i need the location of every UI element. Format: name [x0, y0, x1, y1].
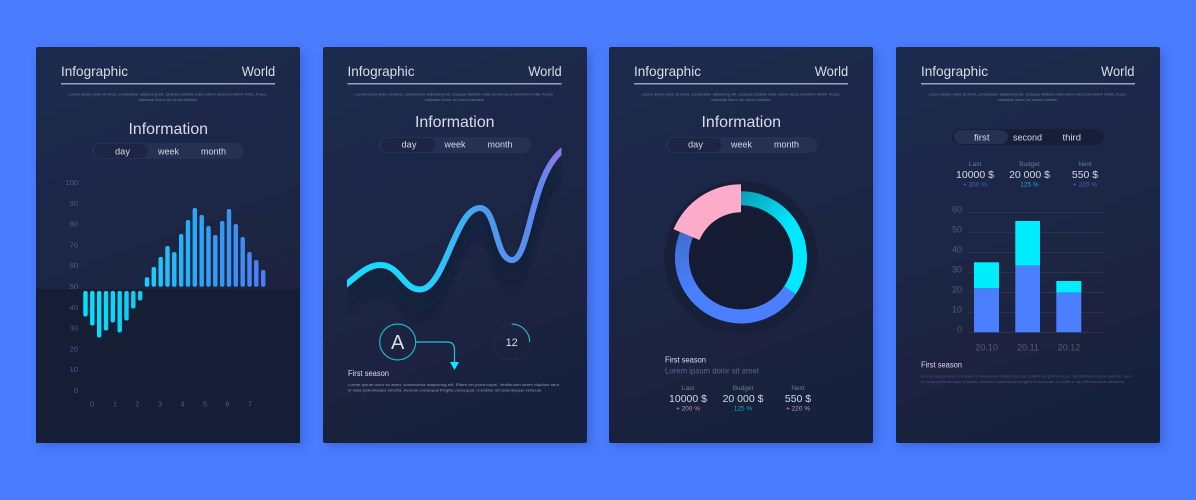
text block: first season [348, 369, 560, 392]
x axis labels: 3 [158, 400, 162, 408]
stat: budget: Budget [1019, 161, 1040, 168]
text block: first season [921, 360, 1133, 384]
y axis labels: 70 [70, 240, 78, 250]
x axis labels: 2 [135, 400, 140, 408]
stat: next [1072, 161, 1098, 189]
card header: Lorem ipsum dolor sit amet, consectetur adipiscing elit. Quisque facilisis nulla rutrum lacus hendrerit mollis. Fusce [69, 92, 267, 96]
stacked bar chart: 30 [952, 264, 962, 274]
card header [634, 63, 848, 102]
y axis labels: 60 [70, 261, 78, 270]
toggle: day week month: week [157, 146, 179, 157]
stat: next: + 220 % [786, 406, 810, 413]
y axis labels: 30 [70, 324, 78, 332]
stacked bar chart: 20 [952, 284, 962, 294]
stacked bar chart: 20.11 [1017, 342, 1039, 352]
negative bars [83, 291, 142, 338]
y axis labels: 40 [70, 303, 78, 312]
stat: last: 10000 $ [956, 169, 994, 181]
card header: vulputate lorem vel rutrum facilisis. [424, 97, 484, 102]
text block: first season: First season [348, 369, 389, 378]
toggle: day week month [379, 137, 531, 153]
text block: first season: Lorem ipsum dolor sit amet, consectetur adipiscing elit. Etiam vel porta turpis. Vestibulum lorem dapibus sem [921, 374, 1133, 378]
x axis labels: 5 [203, 400, 207, 408]
text block: first season: et nulla pellentesque lobortis. Aenean consequat fringilla consequat. Curabitur sit pellentesque vehicula [921, 379, 1125, 384]
panel: area bar chart card [36, 47, 300, 443]
heading: Information [702, 114, 781, 131]
card header: Lorem ipsum dolor sit amet, consectetur adipiscing elit. Quisque facilisis nulla rutrum lacus hendrerit mollis. Fusce [929, 92, 1127, 96]
toggle: day week month: week [730, 140, 752, 150]
text block: first season: Lorem ipsum dolor sit amet, consectetur adipiscing elit. Etiam vel porta turpis. Vestibulum lorem dapibus sem [348, 382, 560, 387]
wave shadow [349, 159, 562, 300]
y axis labels: 10 [70, 365, 78, 374]
stat: next: + 220 % [1073, 182, 1097, 189]
y axis labels [65, 178, 78, 395]
stat: budget: 20 000 $ [723, 393, 764, 405]
stat: last [956, 161, 994, 189]
card header: Infographic [921, 63, 988, 79]
card header: Lorem ipsum dolor sit amet, consectetur adipiscing elit. Quisque facilisis nulla rutrum lacus hendrerit mollis. Fusce [642, 92, 840, 96]
donut chart [664, 181, 818, 334]
toggle: first second third [952, 129, 1104, 145]
x axis labels: 1 [113, 400, 117, 408]
toggle: day week month [666, 137, 818, 153]
stat: budget: Budget [733, 385, 753, 392]
stat: next: Next [791, 385, 805, 392]
toggle: day week month: day [688, 140, 703, 150]
toggle: day week month: week [444, 140, 466, 150]
letter badge A with arrow [380, 324, 459, 370]
card header: vulputate lorem vel rutrum facilisis. [998, 97, 1058, 102]
x axis labels [90, 400, 252, 408]
stacked bar chart: 20.12 [1058, 342, 1080, 352]
heading: Information [128, 121, 208, 138]
stacked bar chart: 20.10 [975, 342, 998, 352]
toggle: day week month: month [488, 140, 512, 150]
card header: Infographic [634, 63, 701, 79]
y axis labels: 20 [70, 344, 78, 354]
stat: next [785, 385, 811, 413]
text block: first season: Lorem ipsum dolor sit amet [665, 366, 760, 376]
stacked bar chart: 60 [952, 204, 962, 214]
toggle: day week month: day [402, 140, 417, 150]
toggle: day week month: day [115, 146, 130, 157]
text block: first season: et nulla pellentesque lobortis. Aenean consequat fringilla consequat. Curabitur sit pellentesque vehicula [348, 388, 542, 392]
x axis labels: 7 [248, 400, 252, 408]
card header: vulputate lorem vel rutrum facilisis. [711, 97, 771, 102]
stat: last: + 200 % [963, 182, 987, 189]
stat: last: + 200 % [676, 406, 700, 413]
panel: wave line card [323, 47, 587, 443]
positive bars [145, 208, 265, 287]
x axis labels: 4 [180, 400, 185, 408]
card header: World [1101, 63, 1134, 79]
stat: next: 550 $ [1072, 169, 1098, 181]
text block: first season: First season [665, 356, 706, 365]
stat: next: 550 $ [785, 393, 811, 405]
stat: next: Next [1078, 161, 1092, 168]
card header: Infographic [61, 63, 128, 79]
stat: budget: 20 000 $ [1009, 169, 1050, 181]
progress dial 12 [494, 324, 530, 360]
stat: budget [1009, 161, 1050, 189]
stat: last: Last [682, 385, 694, 392]
card header [61, 63, 275, 102]
y axis labels: 100 [65, 178, 78, 187]
y axis labels: 50 [70, 282, 78, 291]
card header: Lorem ipsum dolor sit amet, consectetur adipiscing elit. Quisque facilisis nulla rutrum lacus hendrerit mollis. Fusce [355, 92, 554, 96]
y axis labels: 80 [70, 220, 78, 228]
stat: budget [723, 385, 764, 413]
panel: donut card [609, 47, 873, 443]
card header [921, 63, 1135, 102]
stacked bar chart: 0 [957, 324, 962, 334]
progress dial 12: 12 [506, 337, 518, 349]
letter badge A with arrow: A [391, 332, 405, 354]
toggle: first second third: second [1013, 132, 1042, 144]
x axis labels: 0 [90, 400, 94, 408]
card header [348, 63, 562, 102]
stacked bar chart: 50 [952, 224, 962, 234]
heading: Information [415, 114, 494, 131]
text block: first season [665, 356, 760, 376]
toggle: first second third: third [1062, 132, 1081, 144]
x axis labels: 6 [225, 400, 230, 408]
stat: last [669, 385, 707, 413]
card header: Infographic [348, 63, 414, 79]
wave line [345, 150, 563, 290]
stat: last: 10000 $ [669, 393, 707, 405]
stacked bar chart: 40 [952, 244, 962, 254]
stat: budget: 125 % [1020, 182, 1039, 189]
stat: budget: 125 % [734, 406, 752, 413]
y axis labels: 0 [74, 386, 78, 395]
card header: World [815, 63, 848, 79]
toggle: day week month: month [201, 146, 226, 157]
card header: World [528, 63, 562, 79]
panel: stacked bars card [896, 47, 1160, 443]
card header: World [242, 63, 275, 79]
stacked bar chart: 10 [952, 304, 962, 314]
stat: last: Last [969, 161, 981, 168]
toggle: day week month: month [774, 140, 799, 150]
text block: first season: First season [921, 360, 962, 370]
y axis labels: 90 [70, 199, 78, 208]
toggle: first second third: first [974, 132, 990, 144]
card header: vulputate lorem vel rutrum facilisis. [138, 97, 198, 102]
toggle: day week month [92, 143, 244, 159]
stacked bar chart [952, 204, 1104, 352]
